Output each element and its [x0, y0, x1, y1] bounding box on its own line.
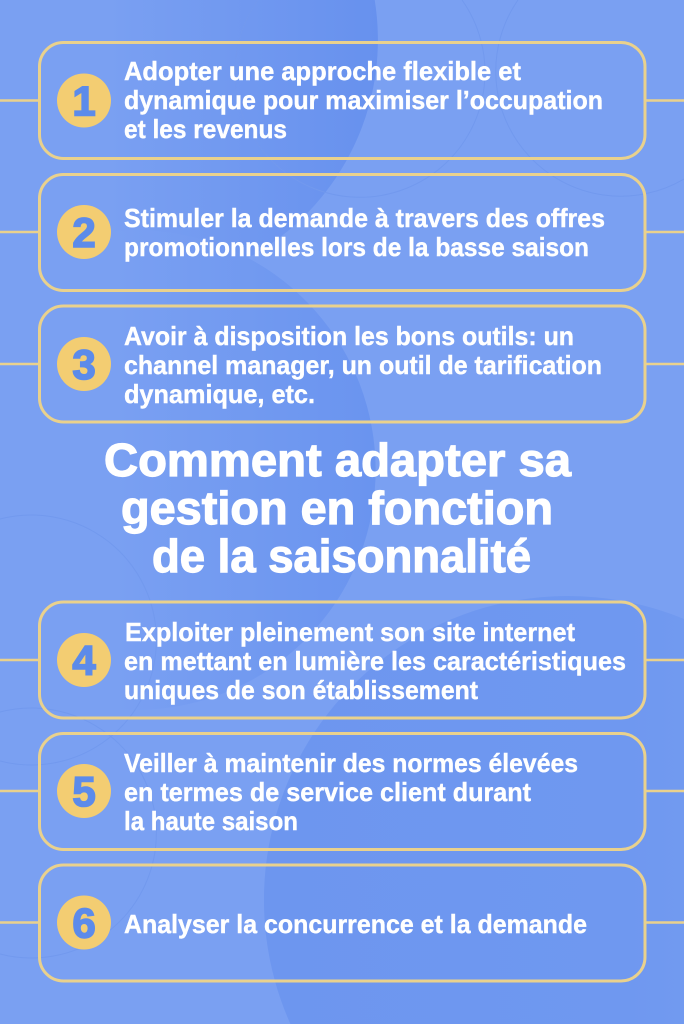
- text 3: dynamique, etc.: [124, 379, 315, 409]
- badge 1: 1: [72, 78, 96, 124]
- badge 4: [57, 633, 111, 687]
- text 3: Avoir à disposition les bons outils: un: [124, 321, 574, 351]
- badge 3: 3: [72, 341, 96, 388]
- card 1: [0, 42, 684, 158]
- text 1: dynamique pour maximiser l’occupation: [124, 85, 603, 115]
- card 5: [0, 734, 684, 850]
- title: [104, 434, 571, 582]
- text 3: channel manager, un outil de tarification: [124, 350, 602, 380]
- title: Comment adapter sa: [104, 434, 571, 486]
- text 1: [124, 56, 603, 144]
- text 1: et les revenus: [124, 114, 287, 144]
- badge 5: [57, 764, 111, 818]
- text 4: [124, 617, 626, 705]
- text 4: uniques de son établissement: [124, 675, 478, 705]
- text 1: Adopter une approche flexible et: [124, 56, 521, 86]
- card 2: [0, 174, 684, 290]
- text 5: Veiller à maintenir des normes élevées: [124, 748, 578, 778]
- title: de la saisonnalité: [152, 530, 531, 582]
- card 4: [0, 602, 684, 718]
- text 4: en mettant en lumière les caractéristiques: [124, 646, 626, 676]
- text 5: la haute saison: [124, 806, 298, 836]
- text 3: [124, 321, 602, 409]
- badge 1: [57, 74, 111, 128]
- card 3: [0, 306, 684, 422]
- card 6: [0, 865, 684, 981]
- badge 5: 5: [72, 768, 96, 815]
- badge 3: [57, 337, 111, 391]
- text 2: [124, 203, 605, 262]
- text 5: en termes de service client durant: [124, 777, 531, 807]
- text 2: Stimuler la demande à travers des offres: [124, 203, 605, 233]
- text 4: Exploiter pleinement son site internet: [125, 617, 575, 647]
- badge 2: [57, 205, 111, 259]
- badge 6: 6: [72, 900, 96, 946]
- title: gestion en fonction: [121, 482, 553, 534]
- text 2: promotionnelles lors de la basse saison: [124, 232, 589, 262]
- text 6: Analyser la concurrence et la demande: [124, 909, 587, 939]
- text 5: [124, 748, 578, 836]
- badge 6: [57, 896, 111, 950]
- badge 2: 2: [72, 209, 96, 256]
- badge 4: 4: [72, 637, 96, 684]
